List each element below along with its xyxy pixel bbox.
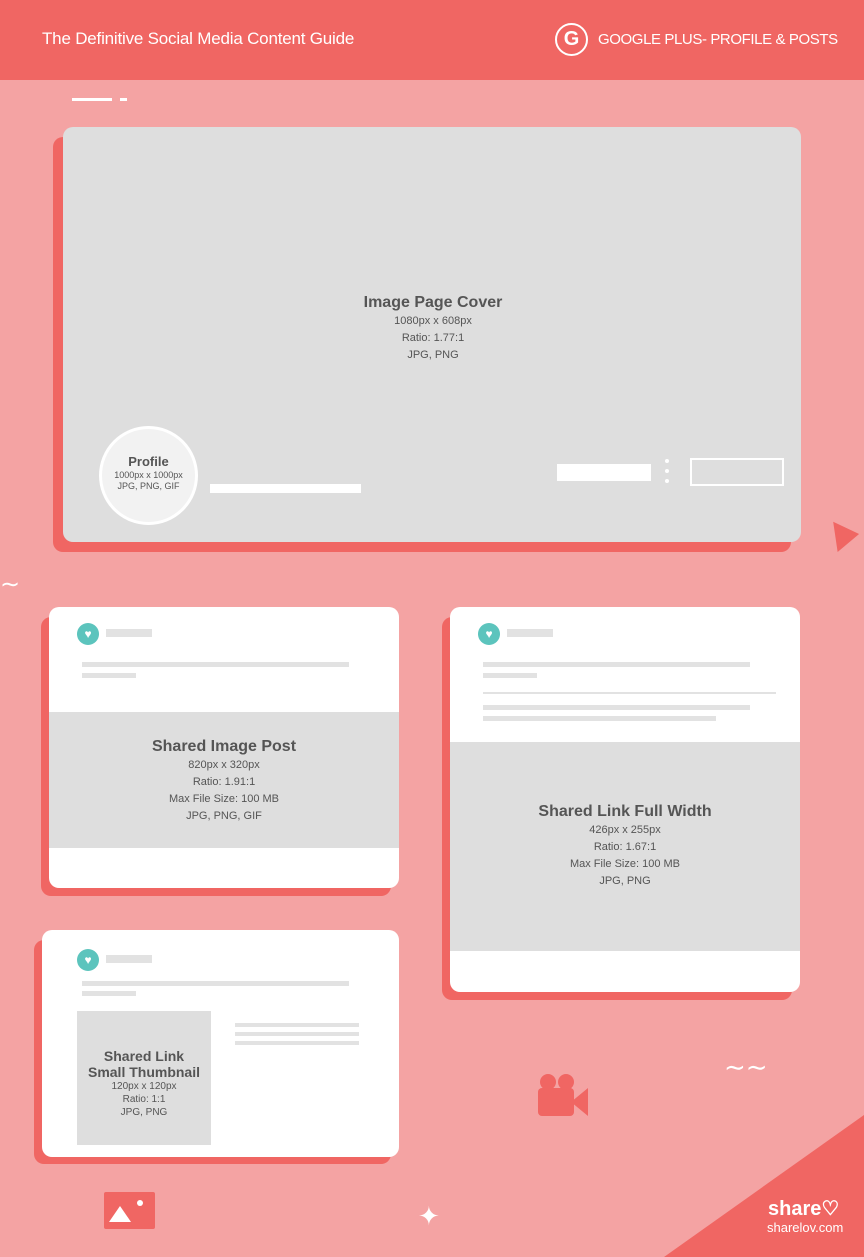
panel: shared image post: [41, 607, 399, 896]
panel: small thumbnail: ♥: [84, 953, 92, 967]
image post area: JPG, PNG, GIF: [186, 810, 262, 822]
profile circle: Profile: [128, 454, 169, 469]
link area: Shared Link Full Width: [538, 803, 712, 820]
header subtitle: GOOGLE PLUS- PROFILE & POSTS: [598, 31, 838, 48]
profile circle: 1000px x 1000px: [114, 470, 183, 480]
thumbnail: JPG, PNG: [121, 1107, 167, 1118]
header title: The Definitive Social Media Content Guide: [42, 29, 354, 48]
text: ∼: [0, 571, 20, 598]
image post area: 820px x 320px: [188, 759, 260, 771]
text: ∼∼: [724, 1052, 768, 1082]
panel: shared image post: ♥: [84, 627, 92, 641]
link area: Max File Size: 100 MB: [570, 858, 680, 870]
link area: Ratio: 1.67:1: [594, 841, 656, 853]
header: [0, 0, 864, 80]
panel: cover: [53, 127, 801, 552]
footer triangle: [664, 1115, 864, 1257]
image post area: [49, 712, 399, 848]
icon: sparkle: ✦: [418, 1201, 440, 1231]
image post area: Max File Size: 100 MB: [169, 793, 279, 805]
cover text: JPG, PNG: [407, 349, 459, 361]
panel: shared link full width: [442, 607, 800, 1000]
link area: [450, 742, 800, 951]
logo: share♡: [768, 1198, 839, 1220]
image post area: Ratio: 1.91:1: [193, 776, 255, 788]
cover text: 1080px x 608px: [394, 315, 472, 327]
panel: shared link full width: ♥: [485, 627, 493, 641]
icon: cursor: [821, 514, 859, 552]
image post area: Shared Image Post: [152, 738, 296, 755]
cover text: Ratio: 1.77:1: [402, 332, 464, 344]
thumbnail: Small Thumbnail: [88, 1064, 200, 1080]
icon: google: G: [564, 28, 579, 50]
icon: image: [104, 1192, 155, 1229]
icon: google: [555, 23, 588, 56]
cover text: [364, 294, 502, 361]
thumbnail: Ratio: 1:1: [123, 1094, 165, 1105]
link area: JPG, PNG: [599, 875, 651, 887]
cover text: Image Page Cover: [364, 294, 502, 311]
profile circle: JPG, PNG, GIF: [117, 481, 180, 491]
thumbnail: [77, 1011, 211, 1145]
panel: small thumbnail: [34, 930, 399, 1164]
link area: 426px x 255px: [589, 824, 661, 836]
thumbnail: Shared Link: [104, 1048, 184, 1064]
thumbnail: 120px x 120px: [111, 1081, 177, 1092]
profile circle: [99, 426, 198, 525]
icon: video camera: [538, 1088, 574, 1116]
text: sharelov.com: [767, 1220, 843, 1235]
